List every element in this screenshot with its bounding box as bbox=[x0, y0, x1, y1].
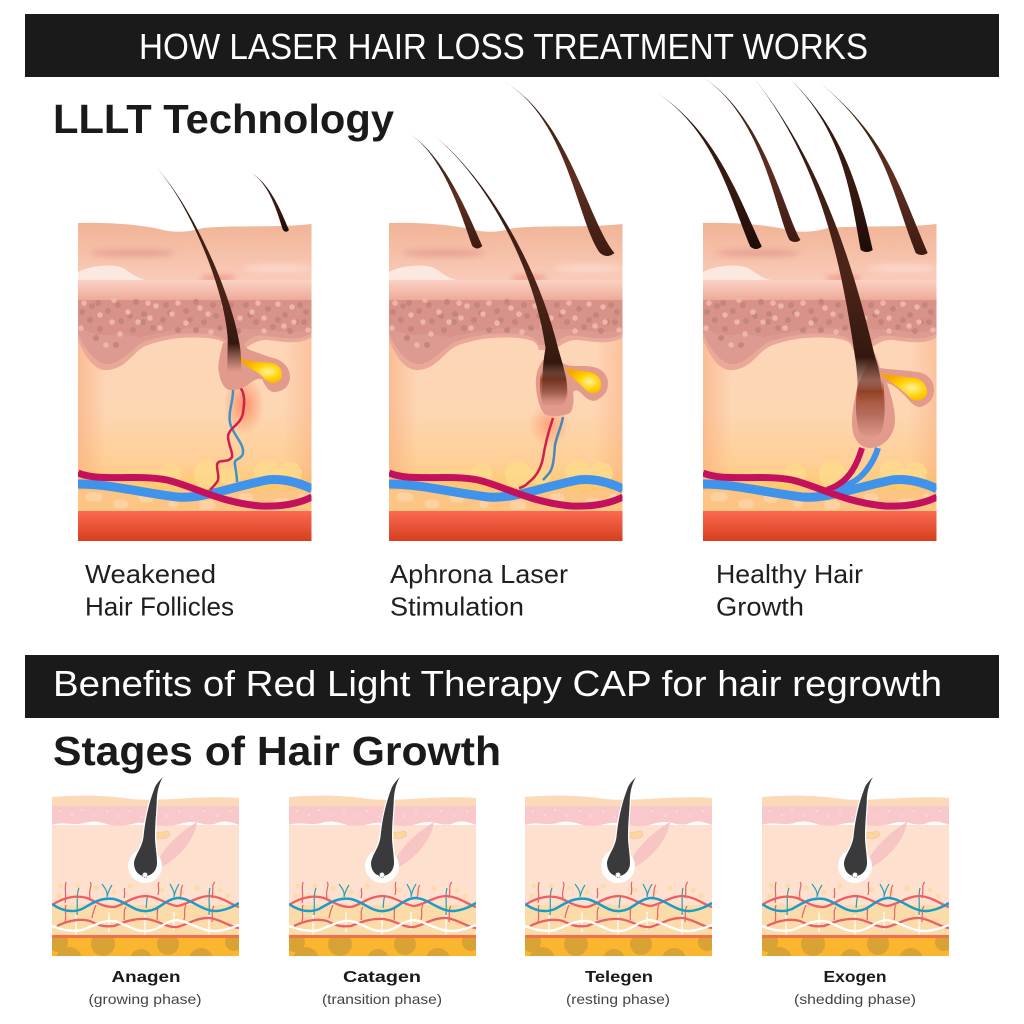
follicle and sebaceous gland bbox=[218, 342, 290, 392]
label: telegen: Telegen bbox=[585, 969, 653, 986]
panel: weakened hair follicles bbox=[78, 168, 313, 541]
long hair C bbox=[753, 77, 882, 403]
label: telegen bbox=[566, 969, 670, 1007]
label: exogen: Exogen bbox=[824, 969, 886, 986]
label: telegen: (resting phase) bbox=[566, 991, 670, 1007]
skin cross-section bbox=[389, 223, 624, 541]
title banner bbox=[25, 14, 999, 77]
label: catagen: Catagen bbox=[343, 969, 421, 986]
thin blood vessels bbox=[519, 417, 563, 488]
bulb bbox=[540, 372, 567, 406]
benefits banner bbox=[25, 655, 999, 718]
hair E bbox=[820, 83, 928, 255]
label: Aphrona laser stimulation: Stimulation bbox=[390, 592, 524, 622]
label: catagen bbox=[322, 969, 442, 1007]
label: Aphrona laser stimulation: Aphrona Laser bbox=[390, 559, 568, 589]
heading: LLLT Technology: LLLT Technology bbox=[53, 96, 394, 142]
panel: laser stimulation bbox=[389, 82, 624, 541]
label: healthy hair growth: Growth bbox=[716, 592, 804, 622]
benefits banner: Benefits of Red Light Therapy CAP for hair regrowth bbox=[53, 663, 942, 704]
panel: healthy hair growth bbox=[657, 77, 938, 541]
skin cross-section bbox=[703, 223, 938, 541]
panel: telogen diagram bbox=[521, 777, 716, 973]
hair B bbox=[702, 77, 800, 242]
follicle and sebaceous gland bbox=[852, 353, 934, 448]
label: healthy hair growth: Healthy Hair bbox=[716, 559, 863, 589]
label: weakened hair follicles: Weakened bbox=[85, 559, 216, 589]
gland oil bbox=[879, 373, 927, 400]
first short hair bbox=[410, 134, 482, 248]
label: weakened hair follicles: Hair Follicles bbox=[85, 592, 234, 622]
long hair bbox=[433, 134, 568, 400]
label: anagen: Anagen bbox=[112, 969, 180, 986]
title banner: HOW LASER HAIR LOSS TREATMENT WORKS bbox=[139, 26, 868, 67]
follicle and sebaceous gland bbox=[536, 358, 608, 416]
label: catagen: (transition phase) bbox=[322, 991, 442, 1007]
bulb bbox=[856, 380, 885, 437]
hair D bbox=[788, 77, 873, 252]
heading: stages of hair growth: Stages of Hair Growth bbox=[53, 728, 501, 774]
gland oil bbox=[238, 358, 282, 383]
panel: anagen diagram bbox=[48, 777, 243, 973]
skin cross-section bbox=[78, 223, 313, 541]
panel: catagen diagram bbox=[285, 777, 480, 973]
label: exogen: (shedding phase) bbox=[794, 991, 916, 1007]
thin blood vessels bbox=[210, 387, 244, 490]
label: anagen: (growing phase) bbox=[88, 991, 202, 1007]
thick blood vessels bbox=[827, 448, 878, 490]
label: exogen bbox=[794, 969, 916, 1007]
panel: exogen diagram bbox=[758, 777, 953, 973]
hair A bbox=[657, 93, 762, 249]
label: anagen bbox=[88, 969, 202, 1007]
second short hair bbox=[505, 82, 614, 256]
long hair bbox=[157, 168, 241, 372]
gland oil bbox=[565, 368, 601, 393]
short hair bbox=[252, 173, 289, 232]
